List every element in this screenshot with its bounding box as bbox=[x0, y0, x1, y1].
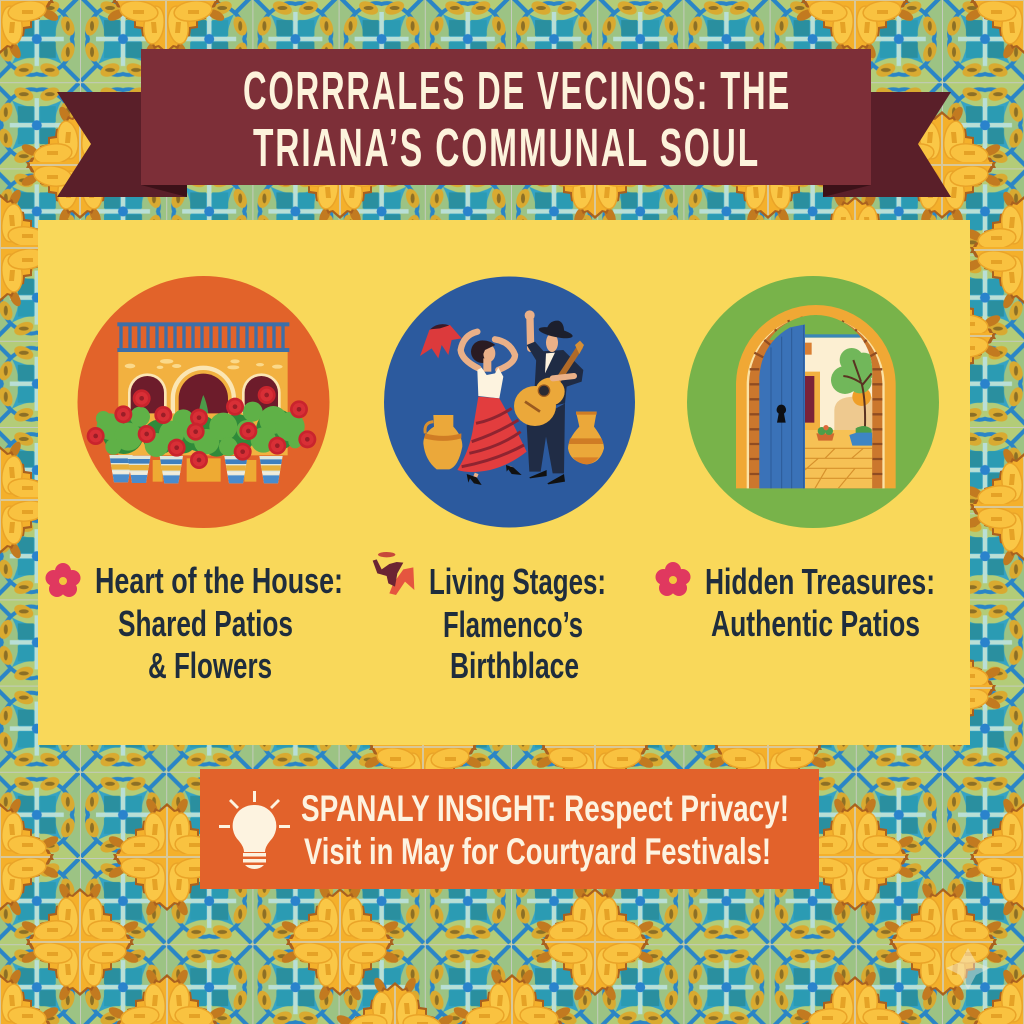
balcony railing bbox=[117, 322, 289, 352]
ribbon right tail bbox=[823, 92, 951, 197]
caption line: Shared Patios: Shared Patios bbox=[118, 603, 293, 644]
building wall with arches bbox=[118, 352, 288, 455]
circle illustration: hidden patio door bbox=[687, 276, 939, 528]
right jug bbox=[568, 412, 604, 464]
caption line: Living Stages: Living Stages: bbox=[429, 561, 606, 602]
caption line: Heart of the House: Heart of the House: bbox=[95, 560, 343, 601]
circle illustration: patio with flowers bbox=[78, 276, 330, 528]
callout background bbox=[200, 769, 819, 889]
female dancer bbox=[457, 332, 527, 485]
ribbon left fold bbox=[141, 185, 187, 197]
left jug bbox=[423, 415, 462, 469]
insight callout bbox=[200, 769, 819, 889]
caption column 2 bbox=[373, 552, 606, 686]
main yellow panel bbox=[38, 220, 970, 745]
icon: small flamenco dancer bbox=[373, 552, 414, 595]
red geranium blooms bbox=[87, 386, 316, 469]
cream arch line bbox=[747, 316, 885, 488]
icon: pink flower right bbox=[656, 562, 690, 596]
caption line: Birthblace: Birthblace bbox=[450, 645, 579, 686]
courtyard view bbox=[769, 315, 872, 488]
caption line: Flamenco's: Flamenco’s bbox=[443, 604, 583, 645]
circle illustration: flamenco dancers bbox=[384, 276, 635, 528]
red shawl bbox=[420, 324, 462, 358]
icon: light bulb bbox=[219, 791, 290, 869]
caption column 1 bbox=[46, 560, 343, 686]
caption line: & Flowers: & Flowers bbox=[148, 645, 272, 686]
caption line: Authentic Patios: Authentic Patios bbox=[711, 603, 920, 644]
outer arch bbox=[736, 305, 896, 488]
large yellow planters bbox=[153, 458, 256, 482]
male guitarist bbox=[514, 310, 584, 484]
blue door bbox=[759, 324, 805, 488]
painted pots bbox=[109, 455, 283, 483]
callout line 2: Visit in May for Courtyard Festivals! bbox=[304, 831, 771, 872]
geranium foliage bbox=[96, 402, 305, 457]
icon: pink flower bbox=[46, 563, 80, 597]
keyhole bbox=[777, 405, 786, 423]
caption line: Hidden Treasures: Hidden Treasures: bbox=[705, 561, 935, 602]
ribbon left tail bbox=[57, 92, 187, 197]
callout line 1: SPANALY INSIGHT: Respect Privacy! bbox=[301, 788, 789, 829]
title ribbon banner bbox=[57, 49, 951, 197]
ribbon right fold bbox=[823, 185, 871, 197]
ribbon main band bbox=[141, 49, 871, 185]
caption column 3 bbox=[656, 561, 935, 644]
brick arch ring bbox=[749, 315, 882, 488]
